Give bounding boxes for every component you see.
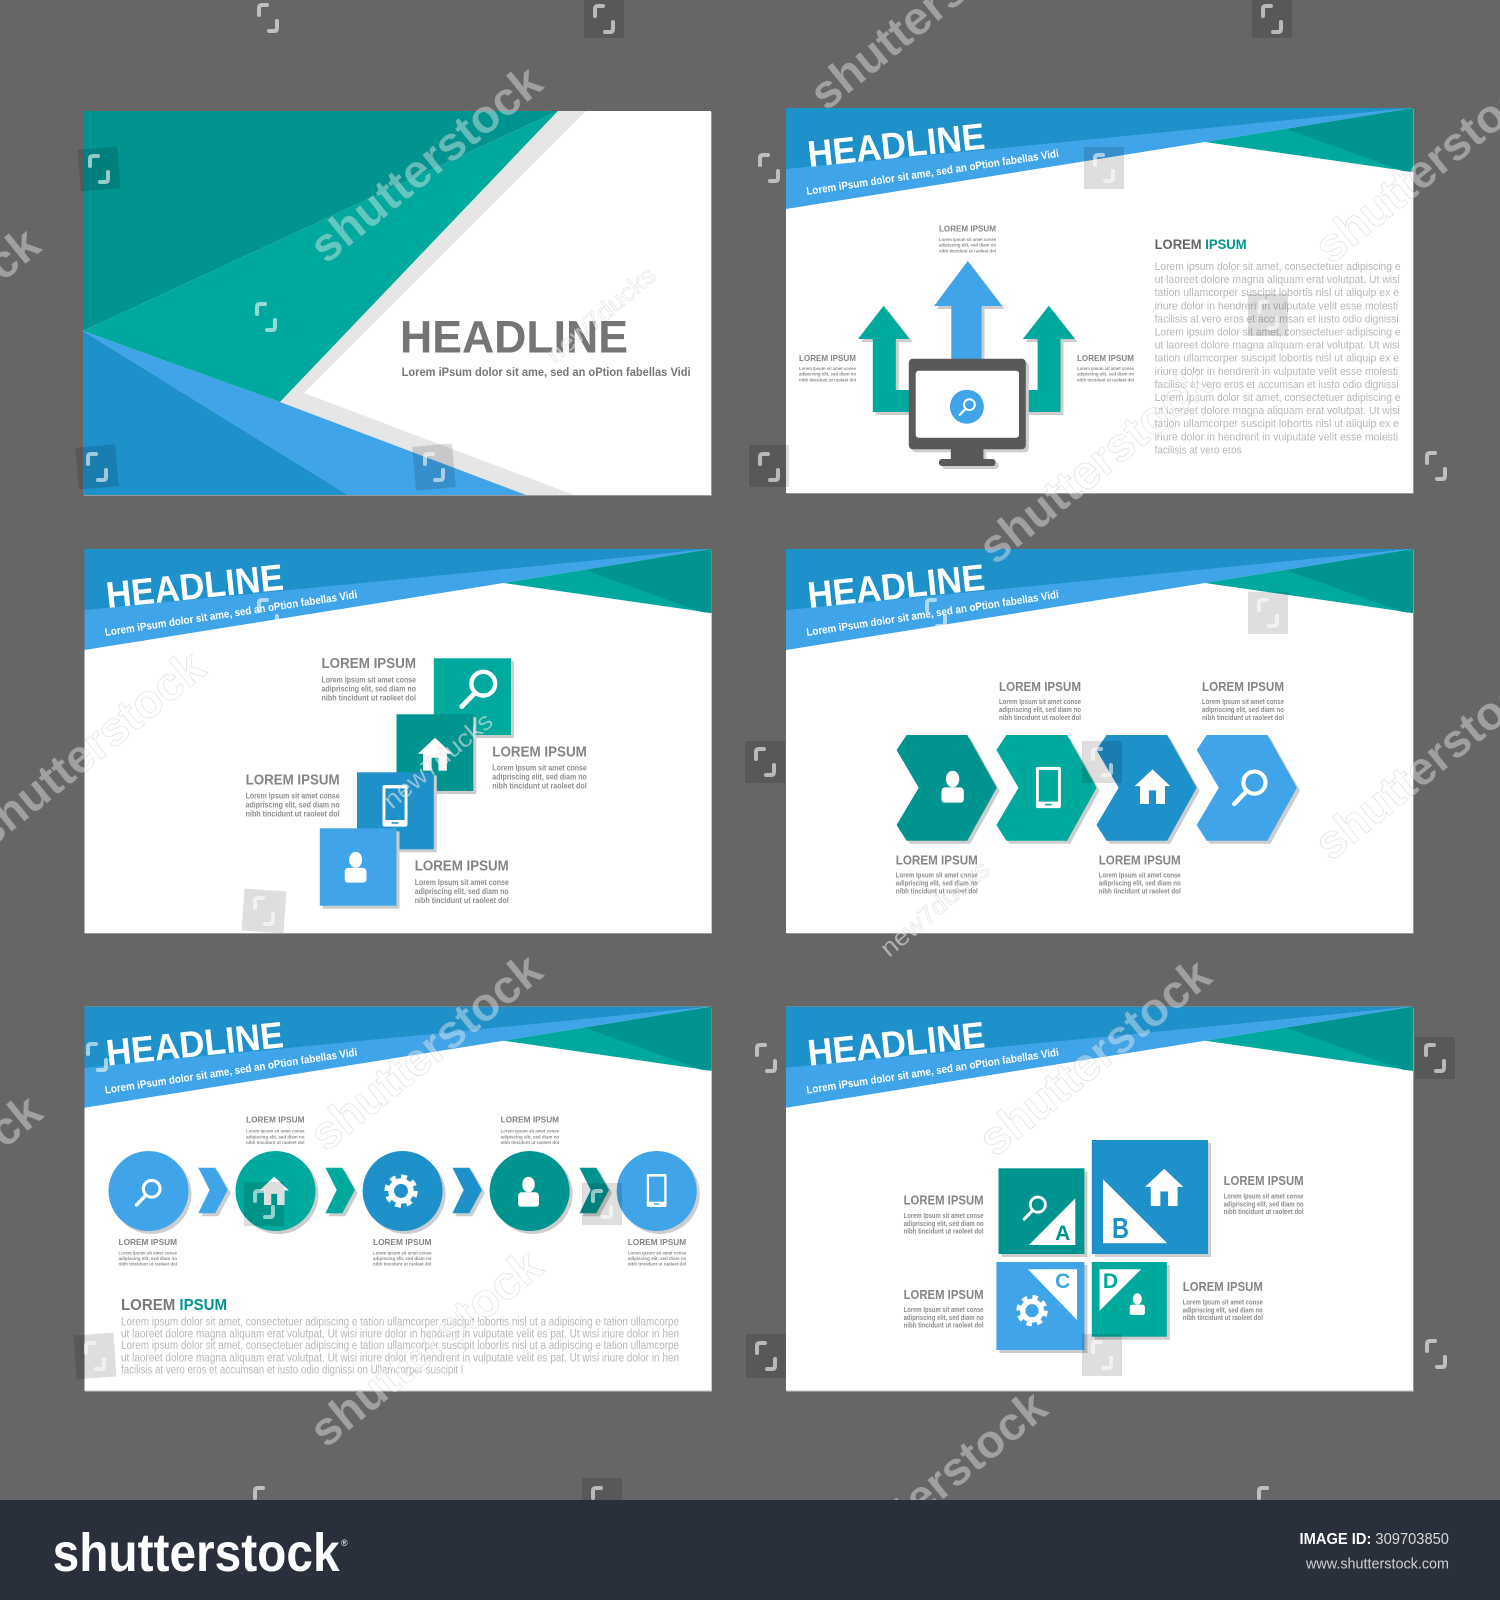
slide 3: staircase squares [84,549,712,934]
body paragraph: iriure dolor in hendrerit in vulputate velit esse molesti [1155,366,1398,378]
caption: right: nibh tincidunt ut raoleet dol [1077,377,1134,382]
caption 3: nibh tincidunt ut raoleet dol [896,888,978,895]
caption 4: LOREM IPSUM [415,859,509,875]
body paragraph: facilisis at vero eros [1155,444,1242,456]
header band [786,1007,1413,1108]
caption 1 [322,656,416,703]
square A [998,1168,1084,1254]
header band: Lorem iPsum dolor sit ame, sed an oPtion fabellas Vidi [806,589,1060,639]
caption 1: Lorem Ipsum sit amet conse [246,1129,305,1134]
body paragraph: ut laoreet dolore magna aliquam erat volutpat. Ut wisi iriure dolor in hendrerit in vulputate velit es pat. Ut wisi iriure dolor in hen [121,1352,679,1364]
caption 1: adipriscing elit, sed diam no [999,707,1081,714]
caption 4: adipriscing elit, sed diam no [1099,880,1181,887]
caption: right: LOREM IPSUM [1077,353,1134,363]
caption A: nibh tincidunt ut raoleet dol [904,1229,984,1236]
square B [1092,1140,1208,1254]
arrow: centre blue [934,261,1002,360]
caption 3: adipriscing elit, sed diam no [896,880,978,887]
caption 5: nibh tincidunt ut raoleet dol [628,1262,686,1267]
body paragraph: facilisis at vero eros et accumsan et iusto odio dignissi [1155,313,1399,325]
watermark text: shutterstock [968,355,1221,574]
caption 3: adipiscing elit, sed diam no [118,1256,177,1261]
slide 6: ABCD squares [786,1007,1414,1392]
caption 4: nibh tincidunt ut raoleet dol [373,1262,432,1267]
caption 3: nibh tincidunt ut raoleet dol [118,1262,177,1267]
caption 4: Lorem Ipsum sit amet conse [1099,872,1181,879]
body paragraph: facilisis at vero eros et accumsan et iusto odio dignissi on Ullamcorper suscipit l [121,1364,463,1376]
caption C: Lorem Ipsum sit amet conse [904,1307,984,1314]
body paragraph: ut laoreet dolore magna aliquam erat volutpat. Ut wisi [1155,340,1400,352]
header band [786,549,1413,650]
caption: top: Lorem Ipsum sit amet conse [939,237,996,242]
header band [786,108,1413,209]
caption 2: nibh tincidunt ut raoleet dol [1202,715,1284,722]
chevron: phone [996,735,1097,841]
caption 1 [999,680,1081,722]
caption 4: Lorem Ipsum sit amet conse [373,1250,432,1256]
slide 2: arrows and monitor [786,108,1414,494]
header band: HEADLINE [806,557,987,616]
caption 4: adipriscing elit, sed diam no [415,887,509,896]
caption 2: adipriscing elit, sed diam no [1202,707,1284,714]
caption: left: Lorem Ipsum sit amet conse [799,366,856,371]
caption: top [939,224,996,253]
caption 3: Lorem Ipsum sit amet conse [118,1250,177,1256]
caption 2: Lorem Ipsum sit amet conse [492,764,587,773]
caption A [904,1193,984,1236]
square: house [396,714,473,791]
body paragraph: ut laoreet dolore magna aliquam erat volutpat. Ut wisi iriure dolor in hendrerit in vulputate velit es pat. Ut wisi iriure dolor in hen [121,1329,679,1341]
header band: HEADLINE [806,116,987,175]
header band [84,549,712,650]
caption B: adipriscing elit, sed diam no [1224,1202,1304,1208]
heading: lorem ipsum: LOREM IPSUM [1155,237,1247,252]
caption 1: nibh tincidunt ut raoleet dol [246,1140,304,1145]
watermark text: new7ducks [875,855,996,963]
caption 5: adipiscing elit, sed diam no [628,1256,686,1261]
arrow 2 [325,1168,355,1213]
caption: top: LOREM IPSUM [939,224,996,234]
caption 4: adipiscing elit, sed diam no [373,1256,432,1261]
caption A: Lorem Ipsum sit amet conse [904,1213,984,1220]
caption D: nibh tincidunt ut raoleet dol [1183,1315,1263,1322]
caption D: LOREM IPSUM [1183,1280,1263,1294]
caption B: LOREM IPSUM [1224,1174,1304,1188]
body paragraph [121,1317,679,1376]
caption 1: nibh tincidunt ut raoleet dol [999,715,1081,722]
watermark text: shutterstock [299,1238,552,1457]
header band [84,1007,712,1108]
caption 3: Lorem Ipsum sit amet conse [896,872,978,879]
header band: HEADLINE [806,1014,987,1074]
caption B: Lorem Ipsum sit amet conse [1224,1194,1304,1201]
body paragraph: facilisis at vero eros et accumsan et iusto odio dignissi [1155,379,1399,391]
header band: Lorem iPsum dolor sit ame, sed an oPtion fabellas Vidi [806,148,1060,198]
body paragraph: iriure dolor in hendrerit in vulputate velit esse molesti [1155,431,1398,443]
website: www.shutterstock.com [1305,1555,1449,1572]
caption 3: LOREM IPSUM [896,853,978,867]
caption C: nibh tincidunt ut raoleet dol [904,1323,984,1330]
caption 3: adipriscing elit, sed diam no [246,801,340,810]
caption 1: nibh tincidunt ut raoleet dol [322,694,416,703]
caption 3 [246,773,340,819]
caption 4: LOREM IPSUM [373,1237,432,1247]
caption 1: Lorem Ipsum sit amet conse [999,699,1081,706]
chevron: search [1197,735,1297,841]
heading: lorem ipsum: LOREM IPSUM [121,1297,227,1314]
footer logo: shutterstock [53,1523,340,1583]
caption C [904,1288,984,1330]
caption 2: adipriscing elit, sed diam no [492,773,587,782]
body paragraph: Lorem ipsum dolor sit amet, consectetuer adipiscing e [1155,261,1401,273]
footer bar [0,1500,1500,1600]
caption A: adipriscing elit, sed diam no [904,1221,984,1228]
caption: right [1077,353,1134,382]
arrow: left teal [858,306,920,412]
chevron: user [897,735,997,841]
header band: HEADLINE [104,1014,285,1074]
watermark text: shutterstock [299,54,552,273]
body paragraph: ut laoreet dolore magna aliquam erat volutpat. Ut wisi [1155,405,1400,417]
chevron: house [1096,735,1197,841]
caption 3: nibh tincidunt ut raoleet dol [246,810,340,819]
caption D [1183,1280,1263,1322]
circle: search [108,1151,188,1231]
body paragraph: Lorem ipsum dolor sit amet, consectetuer adipiscing e tation ullamcorper suscipit lobortis nisl ut a adipiscing e tation ullamcorpe [121,1317,679,1329]
caption 1: LOREM IPSUM [999,680,1081,694]
caption: top: adipiscing elit, sed diam no [939,243,996,248]
circle: house [236,1151,316,1231]
caption: right: adipiscing elit, sed diam no [1077,372,1134,377]
caption 2: adipiscing elit, sed diam no [501,1134,559,1139]
body paragraph [1155,261,1401,456]
caption 2 [492,745,587,791]
caption 3 [896,853,978,895]
watermark text: new7ducks [541,261,662,369]
square C: C [1055,1270,1070,1293]
arrow 3 [452,1168,482,1213]
caption: left [799,353,856,382]
arrow: right teal [1015,306,1075,412]
square: search [434,658,511,735]
header band: HEADLINE [104,557,285,616]
caption 1 [246,1115,305,1145]
caption: left: nibh tincidunt ut raoleet dol [799,377,856,382]
caption: right: Lorem Ipsum sit amet conse [1077,366,1134,371]
caption 4: Lorem Ipsum sit amet conse [415,878,509,887]
caption B: nibh tincidunt ut raoleet dol [1224,1209,1304,1216]
caption 2 [501,1115,560,1145]
caption 2: Lorem Ipsum sit amet conse [501,1129,560,1134]
body paragraph: Lorem ipsum dolor sit amet, consectetuer adipiscing e [1155,326,1401,338]
caption 5 [628,1237,687,1267]
caption 3: Lorem Ipsum sit amet conse [246,792,340,801]
caption: left: adipiscing elit, sed diam no [799,372,856,377]
caption 1: adipriscing elit, sed diam no [322,685,416,694]
caption 2: LOREM IPSUM [1202,680,1284,694]
caption 4: nibh tincidunt ut raoleet dol [1099,888,1181,895]
body paragraph: Lorem ipsum dolor sit amet, consectetuer adipiscing e tation ullamcorper suscipit lobortis nisl ut a adipiscing e tation ullamcorpe [121,1340,679,1352]
body paragraph: tation ullamcorper suscipit lobortis nisl ut aliquip ex e [1155,353,1399,365]
caption 4 [1099,853,1181,895]
square C [996,1262,1084,1350]
square A: A [1055,1222,1070,1245]
arrow 1 [198,1168,228,1213]
watermark text: shutterstock [299,942,552,1161]
watermark text: shutterstock [804,1379,1057,1598]
watermark text: new7ducks [378,707,499,815]
body paragraph: iriure dolor in hendrerit in vulputate velit esse molesti [1155,300,1398,312]
icon: monitor [909,359,1026,466]
caption D: Lorem Ipsum sit amet conse [1183,1300,1263,1307]
image id: IMAGE ID: 309703850 [1300,1531,1449,1548]
caption 4 [373,1237,432,1267]
arrow 4 [580,1168,609,1213]
caption 2: LOREM IPSUM [501,1115,559,1125]
cover subtitle: Lorem iPsum dolor sit ame, sed an oPtion fabellas Vidi [402,365,691,379]
registered mark: ® [341,1538,348,1548]
circle: gear [363,1151,443,1231]
caption 4: LOREM IPSUM [1099,853,1181,867]
caption: top: nibh tincidunt ut raoleet dol [939,248,996,253]
caption 5: LOREM IPSUM [628,1237,686,1247]
caption 2 [1202,680,1284,722]
body paragraph: Lorem ipsum dolor sit amet, consectetuer adipiscing e [1155,392,1401,404]
square D: D [1103,1270,1118,1293]
square D [1092,1262,1167,1337]
slide 1: cover [83,111,712,496]
caption C: adipriscing elit, sed diam no [904,1315,984,1322]
caption: left: LOREM IPSUM [799,353,856,363]
caption 3: LOREM IPSUM [246,773,340,789]
slide 5: circle timeline [84,1007,712,1392]
caption 1: Lorem Ipsum sit amet conse [322,676,416,685]
caption 2: nibh tincidunt ut raoleet dol [501,1140,559,1145]
caption 2: LOREM IPSUM [492,745,587,761]
circle: user [490,1151,570,1231]
caption 2: Lorem Ipsum sit amet conse [1202,699,1284,706]
caption D: adipriscing elit, sed diam no [1183,1308,1263,1314]
caption 4: nibh tincidunt ut raoleet dol [415,896,509,905]
square: phone [357,772,434,849]
caption 4 [415,859,509,905]
watermark text: shutterstock [968,947,1221,1166]
header band: Lorem iPsum dolor sit ame, sed an oPtion fabellas Vidi [104,589,358,639]
caption 2: nibh tincidunt ut raoleet dol [492,782,587,791]
caption 3 [118,1237,177,1267]
caption B [1224,1174,1304,1216]
slide 4: chevron process [786,549,1414,934]
header band: Lorem iPsum dolor sit ame, sed an oPtion fabellas Vidi [104,1047,358,1097]
cover headline: HEADLINE [400,311,628,362]
body paragraph: ut laoreet dolore magna aliquam erat volutpat. Ut wisi [1155,274,1400,286]
square: user [320,828,396,906]
caption 1: LOREM IPSUM [246,1115,304,1125]
header band: Lorem iPsum dolor sit ame, sed an oPtion fabellas Vidi [806,1047,1060,1097]
caption 1: adipiscing elit, sed diam no [246,1134,305,1139]
caption C: LOREM IPSUM [904,1288,984,1302]
caption 3: LOREM IPSUM [118,1237,177,1247]
caption 1: LOREM IPSUM [322,656,416,672]
caption 5: Lorem Ipsum sit amet conse [628,1250,687,1256]
circle: phone [617,1151,697,1231]
caption A: LOREM IPSUM [904,1193,984,1207]
body paragraph: tation ullamcorper suscipit lobortis nisl ut aliquip ex e [1155,418,1399,430]
body paragraph: tation ullamcorper suscipit lobortis nisl ut aliquip ex e [1155,287,1399,299]
square B: B [1112,1213,1129,1245]
